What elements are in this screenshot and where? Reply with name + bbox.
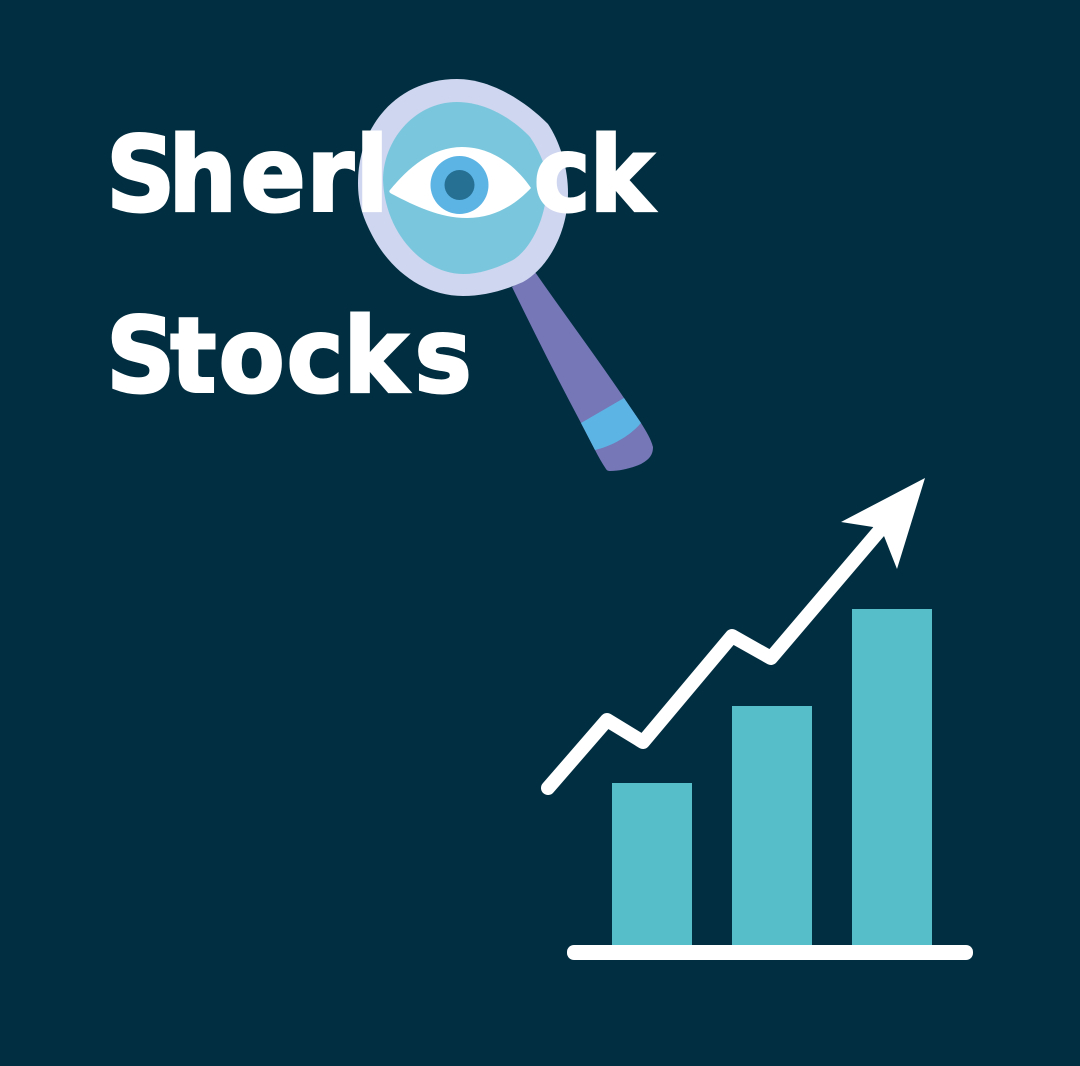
- eye: [389, 147, 531, 218]
- title word: ck: ck: [534, 116, 656, 235]
- arrow: rising trend: [548, 478, 925, 788]
- bar chart with rising arrow: [548, 478, 973, 960]
- title word: Stocks: Stocks: [106, 297, 472, 416]
- bar 1: [612, 783, 692, 948]
- bar 2: [732, 706, 812, 948]
- magnifier ring: [358, 79, 568, 296]
- chart baseline: [567, 945, 973, 960]
- title: [106, 116, 656, 416]
- title word: Sherl: Sherl: [106, 116, 388, 235]
- bar 3: [852, 609, 932, 948]
- magnifier lens: [383, 102, 547, 274]
- magnifier handle: [512, 272, 653, 471]
- icon: magnifying glass with eye: [358, 79, 653, 471]
